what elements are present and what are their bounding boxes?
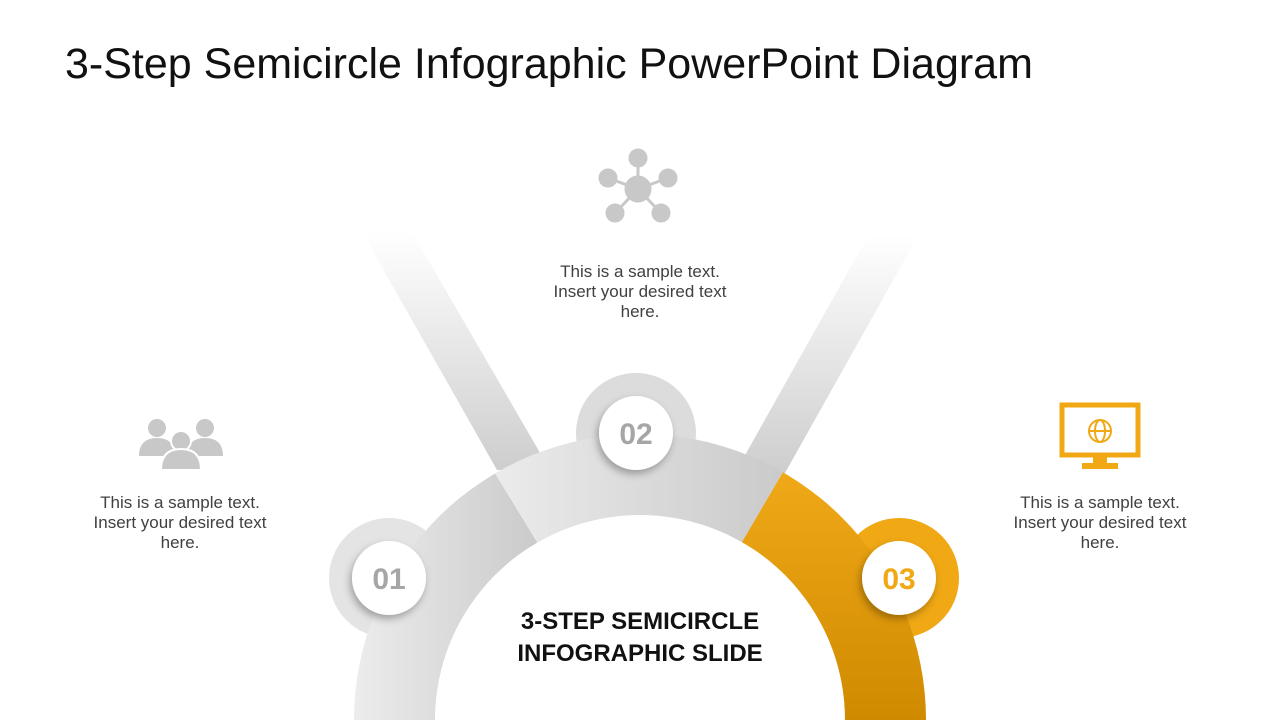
number circles: 03 [882, 563, 916, 596]
text: step 2: Insert your desired text [554, 282, 726, 301]
number circles: 02 [619, 418, 653, 451]
title: 3-Step Semicircle Infographic PowerPoint Diagram [65, 40, 1033, 88]
text: step 3: Insert your desired text [1014, 513, 1186, 532]
text: step 3: This is a sample text. [1020, 493, 1180, 512]
text: step 2: This is a sample text. [560, 262, 720, 281]
center label: INFOGRAPHIC SLIDE [517, 640, 763, 667]
bump circles [329, 373, 959, 638]
ring segments [354, 440, 926, 720]
text: step 2: here. [621, 302, 659, 321]
text: step 3: here. [1081, 533, 1119, 552]
center label: 3-STEP SEMICIRCLE [521, 608, 759, 635]
beams [362, 232, 918, 473]
icon: monitor [1062, 405, 1138, 469]
number circles: 01 [372, 563, 406, 596]
text: step 1 [94, 493, 266, 552]
text: step 2 [554, 262, 726, 321]
icon: people [139, 419, 223, 470]
center label [517, 608, 763, 667]
text: step 1: Insert your desired text [94, 513, 266, 532]
text: step 3 [1014, 493, 1186, 552]
diagram [139, 148, 1140, 720]
text: step 1: This is a sample text. [100, 493, 260, 512]
icon: network [600, 150, 676, 221]
text: step 1: here. [161, 533, 199, 552]
number circles [352, 396, 936, 615]
